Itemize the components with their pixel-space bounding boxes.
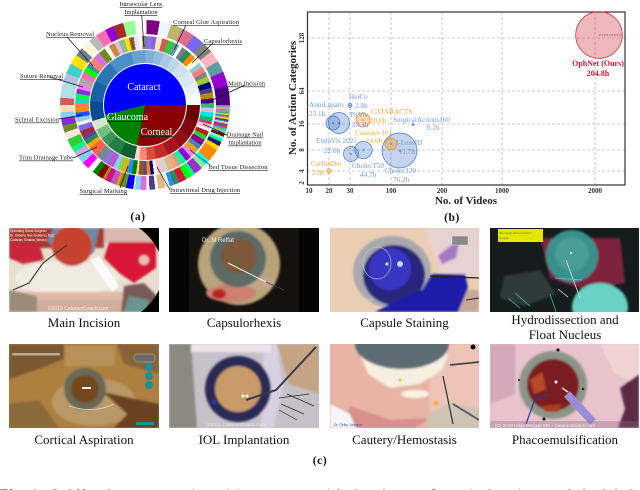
photo: cortical aspiration: [9, 344, 159, 428]
sunburst ring: outer action colours: [60, 20, 230, 190]
sunburst ring: middle action colours: [75, 36, 214, 175]
photo: IOL implantation: ©2021 CataractCoach.com: [207, 421, 265, 428]
y axis tick labels: 8: [298, 148, 306, 152]
photo: cautery / hemostasis: [330, 344, 479, 428]
blue dataset labels: PitVis: [350, 111, 368, 119]
photo: IOL implantation: [169, 344, 319, 428]
chart: surgical action sunburst: [60, 20, 230, 190]
bubble chart: videos vs action categories: No. of Action Categories: [287, 40, 299, 155]
sunburst core labels: Glaucoma: [107, 112, 149, 123]
sunburst gap: [88, 49, 200, 161]
leader lines: [50, 15, 245, 190]
caption: Cortical Aspiration: Cortical Aspiration: [34, 432, 134, 447]
sunburst labels and leader lines: Implantation: [228, 140, 262, 146]
blue dataset labels: 44.7h: [360, 171, 377, 179]
x axis tick labels: [306, 187, 602, 195]
sunburst labels and leader lines: Trim Drainage Tube: [19, 154, 73, 162]
blue dataset labels: 22.0h: [324, 147, 341, 155]
sunburst core labels: Corneal: [141, 127, 173, 138]
sunburst labels and leader lines: Suture Removal: [20, 73, 63, 80]
orange dataset labels: Cataract-101: [355, 129, 393, 137]
sunburst labels and leader lines: Surgical Marking: [80, 188, 128, 195]
photo: capsulorhexis: [169, 228, 319, 312]
y axis tick labels: [298, 32, 306, 185]
x axis tick labels: 200: [437, 187, 448, 195]
photo: phacoemulsification: [490, 344, 639, 428]
blue dataset labels: 76.2h: [393, 176, 410, 184]
blue dataset labels: [309, 93, 450, 184]
caption: Hydrodissection and Float Nucleus: Hydrodissection and: [511, 312, 619, 327]
y axis tick labels: 64: [298, 87, 306, 94]
blue dataset labels: AutoLaparo: [309, 101, 344, 109]
sunburst ring: procedure phases: [90, 50, 200, 160]
sunburst labels and leader lines: [15, 1, 268, 195]
sunburst core labels: Cataract: [127, 82, 161, 93]
x axis tick labels: 20: [326, 187, 333, 195]
caption: Cautery/Hemostasis: Cautery/Hemostasis: [352, 432, 457, 447]
panel label (a): (a): [130, 211, 146, 223]
photo: main incision: Culiacan, Sinaloa, Mexico: [10, 238, 47, 242]
panel label (b): (b): [444, 212, 460, 224]
y axis tick labels: 2: [298, 181, 306, 185]
sunburst labels and leader lines: Scleral Excision: [15, 116, 60, 124]
x axis tick labels: 2000: [588, 187, 602, 195]
y axis tick labels: 128: [298, 32, 306, 43]
caption: Phacoemulsification: Phacoemulsification: [512, 432, 619, 447]
blue dataset labels: SurgicalActions160: [393, 116, 450, 124]
blue dataset labels: CholecT50: [352, 162, 384, 170]
bubble: OphNet: [576, 12, 622, 58]
photo: main incision: [9, 228, 159, 312]
photo: capsule staining: Dr Viraat Mayor: [342, 297, 374, 302]
caption: Hydrodissection and Float Nucleus: [511, 312, 619, 342]
orange dataset labels: CATARACTS: [371, 108, 412, 116]
caption: Capsule Staining: Capsule Staining: [360, 315, 449, 330]
sunburst labels and leader lines: Drainage Nail: [227, 132, 264, 138]
bubbles: blue datasets: [326, 104, 417, 168]
blue dataset labels: I-LensID: [396, 139, 422, 147]
caption: Main Incision: Main Incision: [48, 315, 121, 330]
bubble chart: videos vs action categories: [287, 12, 625, 207]
sunburst core labels: [107, 82, 173, 138]
photo: cautery / hemostasis: Dr. Philip Johnson: [334, 423, 362, 427]
blue dataset labels: 0.2h: [427, 124, 440, 132]
blue dataset labels: EndoVis 2021: [316, 137, 357, 145]
blue dataset labels: Cholec120: [385, 167, 417, 175]
OphNet label: OphNet (Ours): [572, 59, 624, 68]
sunburst gap: [74, 34, 216, 176]
sunburst core: Cataract, Glaucoma, Corneal: [104, 64, 186, 146]
orange dataset labels: 14.0h: [366, 137, 383, 145]
photo: hydrodissection and float nucleus: [490, 228, 639, 312]
x axis tick labels: 100: [386, 187, 397, 195]
sunburst labels and leader lines: Corneal Glue Aspiration: [173, 19, 240, 26]
photo: phacoemulsification: (C) 2018 Uday Devgan MD - CataractCoach.com: [495, 423, 595, 428]
caption: Capsulorhexis: Capsulorhexis: [207, 315, 281, 330]
blue dataset labels: 2.8h: [355, 102, 368, 110]
panel label (c): (c): [313, 455, 327, 467]
orange dataset labels: CatRelDet: [311, 160, 341, 168]
x axis tick labels: 30: [346, 187, 354, 195]
bubble centre marks: [332, 35, 622, 155]
orange dataset labels: 20.0h: [370, 117, 387, 125]
photo: capsulorhexis: Dr. M Reffat: [202, 238, 234, 244]
sunburst labels and leader lines: Intravitreal Drug Injection: [170, 187, 241, 194]
sunburst labels and leader lines: Implantation: [124, 9, 158, 16]
y axis tick labels: 4: [298, 169, 306, 173]
sunburst gap: [102, 63, 186, 147]
photo: main incision: Dr. Gilberto Noé Gutiérrez Ruiz: [10, 234, 55, 238]
plot frame and grid: [307, 12, 625, 185]
sunburst labels and leader lines: Main Incision: [228, 80, 266, 88]
sunburst labels and leader lines: Bed Tissue Dissection: [208, 164, 268, 171]
sunburst labels and leader lines: Capsulorhexis: [204, 38, 242, 45]
photo: main incision: ©2019 CataractCoach.com: [48, 305, 108, 312]
sunburst labels and leader lines: Intraocular Lens: [120, 1, 163, 8]
y axis tick labels: 16: [298, 120, 306, 128]
bubbles: orange datasets: [327, 113, 397, 173]
orange dataset labels: 2.0h: [312, 169, 325, 177]
axis titles: No. of Videos: [435, 195, 498, 207]
orange dataset labels: [311, 108, 412, 177]
caption: Hydrodissection and Float Nucleus: Float Nucleus: [529, 327, 601, 342]
blue dataset labels: 23.1h: [309, 110, 326, 118]
photo: capsule staining: [330, 228, 479, 312]
blue dataset labels: HeiCo: [349, 93, 368, 101]
sunburst labels and leader lines: Nucleus Removal: [46, 31, 94, 38]
photo: hydrodissection and float nucleus: on-type: [499, 236, 509, 240]
x axis tick labels: 10: [306, 187, 313, 195]
x axis tick labels: 1000: [495, 187, 510, 195]
photo: main incision: Operating Guest Surgeon:: [10, 229, 47, 233]
caption: IOL Implantation: IOL Implantation: [199, 432, 290, 447]
OphNet label: [572, 59, 624, 78]
blue dataset labels: 11.7h: [399, 148, 415, 156]
blue dataset labels: 33.3h: [352, 121, 369, 129]
OphNet label: 204.8h: [587, 69, 610, 78]
photo: hydrodissection and float nucleus: http://ophnet/home/videos: [499, 231, 532, 235]
